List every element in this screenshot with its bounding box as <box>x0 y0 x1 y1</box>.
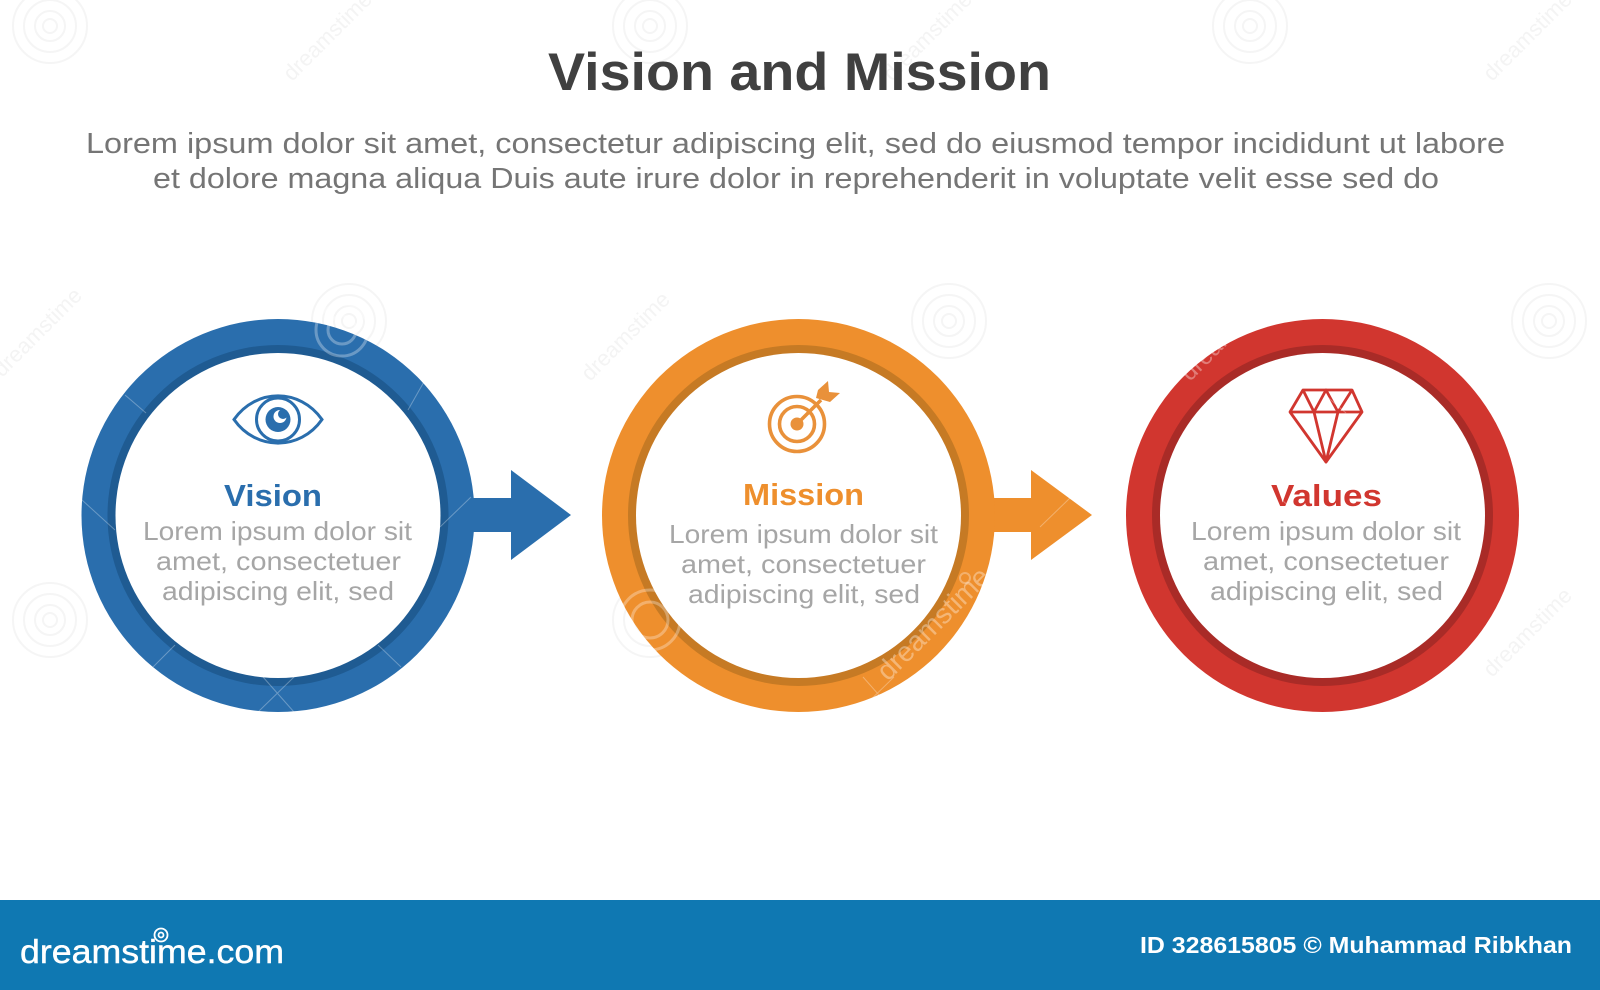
text: values body <box>1191 516 1462 606</box>
watermark pattern: dreamstime <box>1478 583 1577 682</box>
intro paragraph: Lorem ipsum dolor sit amet, consectetur adipiscing elit, sed do eiusmod tempor incididunt ut labore <box>86 128 1505 160</box>
heading: mission: Mission <box>743 477 864 512</box>
text: mission body: adipiscing elit, sed <box>688 579 920 609</box>
panel: vision <box>82 319 571 712</box>
intro paragraph: et dolore magna aliqua Duis aute irure dolor in reprehenderit in voluptate velit esse sed do <box>153 163 1439 195</box>
text: mission body <box>669 519 939 609</box>
icon: diamond <box>1290 390 1362 462</box>
text: vision body: amet, consectetuer <box>156 546 401 576</box>
text: vision body: Lorem ipsum dolor sit <box>143 516 413 546</box>
text: vision body: adipiscing elit, sed <box>162 576 394 606</box>
panel: mission <box>602 319 1092 712</box>
text: values body: amet, consectetuer <box>1203 546 1449 576</box>
watermark overlay: dreamstime <box>1175 278 1283 386</box>
watermark overlay <box>82 278 1600 712</box>
arrow: vision to mission <box>465 470 571 560</box>
title: Vision and Mission <box>548 43 1051 102</box>
text: mission body: amet, consectetuer <box>681 549 926 579</box>
text: values body: adipiscing elit, sed <box>1210 576 1443 606</box>
intro paragraph <box>86 128 1505 195</box>
image credit: ID 328615805 © Muhammad Ribkhan <box>1140 932 1572 958</box>
ring: mission <box>602 319 995 712</box>
icon: target with arrow <box>770 381 840 452</box>
watermark pattern: dreamstime <box>576 287 675 386</box>
text: values body: Lorem ipsum dolor sit <box>1191 516 1462 546</box>
text: mission body: Lorem ipsum dolor sit <box>669 519 939 549</box>
panel: values <box>1126 319 1519 712</box>
heading: values: Values <box>1271 478 1382 513</box>
arrow: mission to values <box>980 470 1092 560</box>
icon: eye <box>234 396 322 443</box>
watermark pattern <box>0 0 1586 682</box>
watermark pattern: dreamstime <box>278 583 377 682</box>
ring: values <box>1126 319 1519 712</box>
text: vision body <box>143 516 413 606</box>
logo text: dreamstime.com <box>20 933 284 970</box>
ring: vision <box>82 319 474 712</box>
footer bar <box>0 900 1600 990</box>
heading: vision: Vision <box>224 478 322 513</box>
icon: logo spiral <box>154 928 168 942</box>
watermark overlay: dreamstime <box>870 561 996 686</box>
